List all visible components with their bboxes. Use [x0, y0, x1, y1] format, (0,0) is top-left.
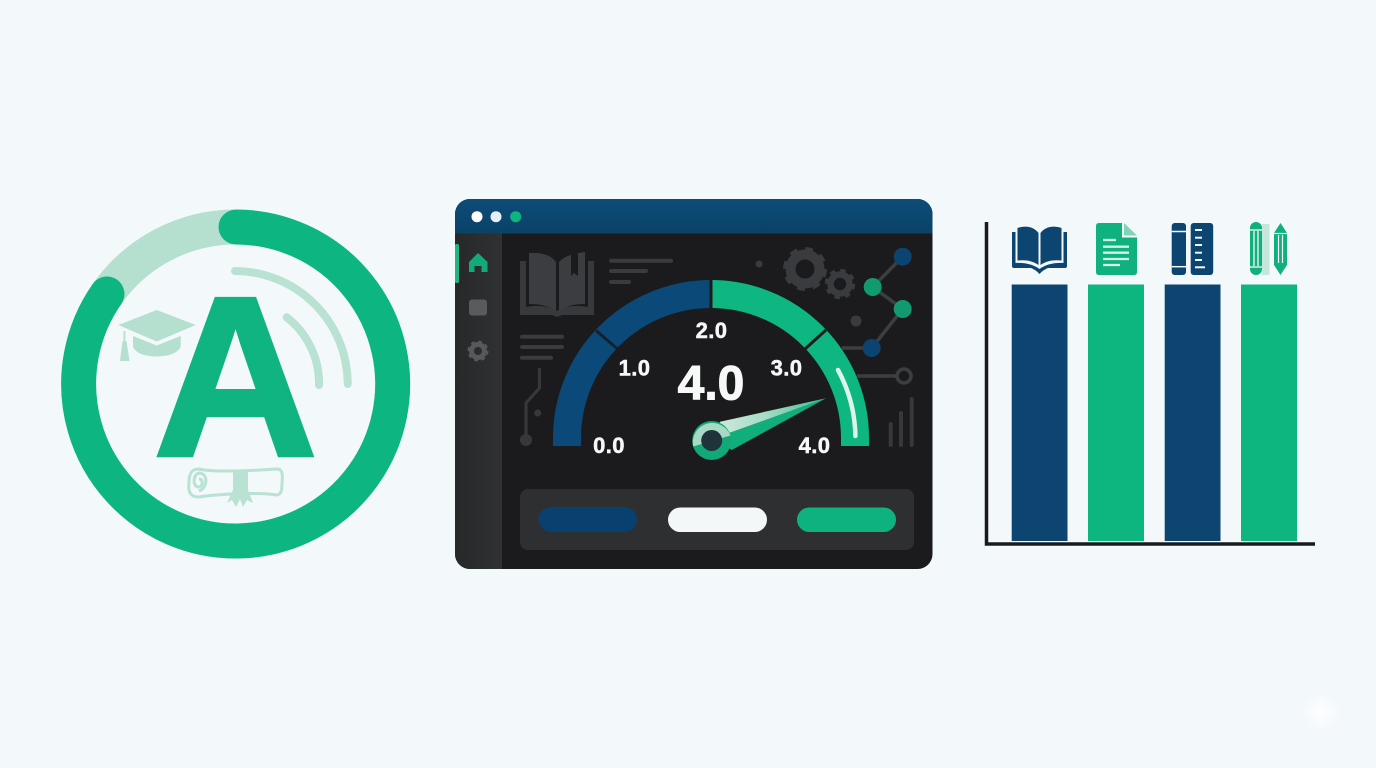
gauge labels: 1.0	[619, 356, 650, 380]
icon: graduation cap	[118, 310, 196, 361]
panel: grade emblem	[79, 227, 393, 541]
progress ring track	[107, 227, 236, 294]
bottom control bar	[520, 489, 914, 550]
chart axes	[986, 222, 1315, 544]
text lines placeholder top	[611, 261, 671, 282]
icon: open book	[1012, 227, 1067, 274]
bar 4	[1241, 284, 1297, 541]
sidebar	[455, 233, 502, 569]
bar 2	[1088, 284, 1144, 541]
active nav indicator	[455, 244, 459, 283]
text lines placeholder left	[522, 337, 562, 358]
icon: diploma scroll	[189, 469, 282, 507]
progress ring	[79, 227, 393, 541]
bar 3	[1165, 284, 1220, 541]
icon: settings gear	[469, 342, 487, 360]
gauge needle	[692, 398, 826, 460]
icon: sparkle watermark	[1301, 692, 1341, 732]
icon: home	[469, 253, 488, 272]
icon: signal arcs	[235, 271, 348, 385]
icon: pencils	[1250, 222, 1287, 275]
navy pill	[538, 507, 637, 532]
icon: document	[1096, 223, 1137, 275]
gauge labels: 0.0	[593, 433, 625, 458]
bar 1	[1012, 284, 1068, 541]
gauge labels: 3.0	[771, 356, 802, 380]
node network	[842, 248, 912, 383]
title bar	[455, 199, 932, 234]
white pill	[668, 508, 767, 532]
window controls	[472, 211, 521, 222]
icon: gears	[756, 250, 862, 326]
window body	[455, 199, 932, 569]
gauge labels: 4.0	[799, 433, 830, 458]
gauge value: 4.0	[678, 358, 744, 410]
green pill	[797, 508, 896, 532]
gauge arc	[567, 279, 855, 446]
panel: bar chart with subject icons	[986, 222, 1315, 544]
gauge labels	[593, 318, 830, 458]
icon: book and ruler	[1172, 223, 1213, 275]
icon: open book watermark	[520, 252, 594, 317]
icon: square nav	[469, 300, 487, 316]
letter A: A	[153, 250, 318, 504]
circuit decoration	[520, 368, 541, 446]
gauge labels: 2.0	[696, 318, 727, 343]
panel: dashboard window	[455, 199, 932, 569]
mini bars decoration	[891, 399, 912, 445]
